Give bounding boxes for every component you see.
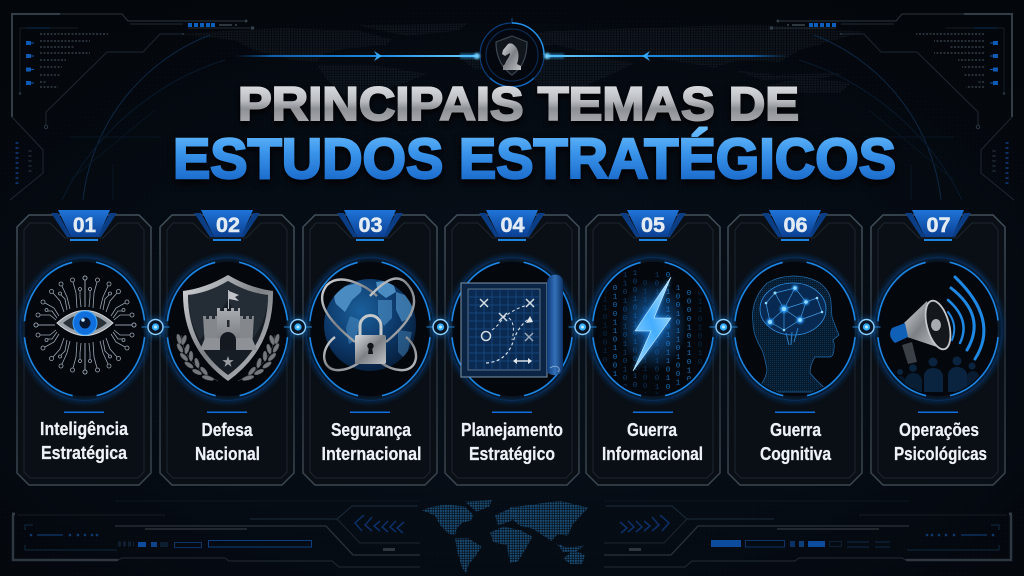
hud frame top left: [10, 14, 254, 200]
panel: 03 Segurança Internacional: [303, 210, 437, 485]
icon: lightning and binary rain: [603, 270, 702, 394]
panel: 04 Planejamento Estratégico: [445, 210, 579, 485]
label 03: Internacional: [322, 444, 422, 464]
world map bottom center: [422, 500, 588, 573]
panel: 05 Guerra Informacional: [586, 210, 720, 485]
title line 2: ESTUDOS ESTRATÉGICOS: [173, 127, 896, 191]
panel: 02 Defesa Nacional: [160, 210, 294, 485]
icon: lightning and binary rain: 0110100101: [696, 290, 704, 376]
label 01: Estratégica: [41, 443, 128, 463]
label 06: [760, 420, 832, 464]
icon: circuit eye: [34, 276, 136, 374]
laurel left: [176, 334, 218, 381]
icon ring 02: [164, 257, 292, 401]
label 07: Operações: [899, 420, 979, 440]
label 01: [40, 419, 129, 463]
icon ring 06: [731, 257, 859, 401]
header arrow line left: [235, 51, 478, 61]
label 03: Segurança: [331, 420, 412, 440]
connector node 1: [142, 316, 170, 338]
label 02: [195, 420, 260, 464]
label 02: Nacional: [195, 444, 260, 464]
icon: lightning and binary rain: 0110100101100101: [641, 280, 649, 418]
number 03: 03: [358, 214, 382, 237]
title line 1: PRINCIPAIS TEMAS DE: [238, 77, 799, 130]
icon: lightning and binary rain: 110100101101001: [621, 272, 629, 401]
icon: tactical map scroll: [461, 275, 563, 377]
label 07: [894, 420, 987, 464]
label 06: Guerra: [770, 420, 822, 440]
icon: globe and padlock: [322, 279, 416, 371]
icon ring 04: [448, 257, 576, 401]
label 01: Inteligência: [40, 419, 129, 439]
label 04: Estratégico: [469, 444, 555, 464]
connector node 3: [426, 316, 454, 338]
world map behind title: [180, 23, 865, 103]
connector node 6: [852, 316, 880, 338]
label 06: Cognitiva: [760, 444, 832, 464]
number 01: 01: [73, 214, 96, 237]
number 02: 02: [216, 214, 240, 237]
label 05: [602, 420, 703, 464]
label 07: Psicológicas: [894, 444, 987, 464]
connector node 5: [710, 316, 738, 338]
laurel right: [238, 334, 280, 381]
label 04: [461, 420, 563, 464]
panel: 01 Inteligência Estratégica: [17, 210, 151, 485]
icon: head with neural brain: [753, 276, 839, 392]
icon: shield castle: [176, 275, 280, 381]
connector node 4: [568, 316, 596, 338]
number 06: 06: [784, 214, 808, 237]
title: [173, 77, 896, 191]
icon: lightning and binary rain: 0000101101001: [685, 290, 693, 402]
icon: lightning and binary rain: 1001011010011: [674, 285, 682, 397]
icon ring 05: [589, 257, 717, 401]
label 05: Informacional: [602, 444, 703, 464]
number 07: 07: [926, 214, 950, 237]
icon: lightning and binary rain: 01001101001010: [611, 285, 619, 405]
hud frame top right: [770, 14, 1014, 200]
connector node 2: [284, 316, 312, 338]
label 03: [322, 420, 422, 464]
label 04: Planejamento: [461, 420, 563, 440]
header arrow line right: [546, 51, 789, 61]
label 05: Guerra: [627, 420, 678, 440]
hud frame bottom right: [604, 501, 1012, 567]
panel: 06 Guerra Cognitiva: [728, 210, 862, 485]
panel: 07 Operações Psicológicas: [871, 210, 1005, 485]
icon: lightning and binary rain: 0110100101101: [601, 288, 609, 400]
icon ring 03: [306, 257, 434, 401]
icon: lightning and binary rain: 01101001011010010: [664, 272, 672, 418]
label 02: Defesa: [202, 420, 253, 440]
icon: lightning and binary rain: 1010010110100110: [653, 272, 661, 410]
number 04: 04: [500, 214, 525, 237]
hud frame bottom left: [12, 501, 420, 567]
emblem: knight shield: [474, 18, 550, 88]
icon: lightning and binary rain: 10010110100110101: [631, 270, 639, 416]
icon: megaphone and crowd: [890, 277, 984, 392]
number 05: 05: [641, 214, 665, 237]
icon ring 07: [874, 257, 1002, 401]
icon ring 01: [20, 257, 148, 401]
